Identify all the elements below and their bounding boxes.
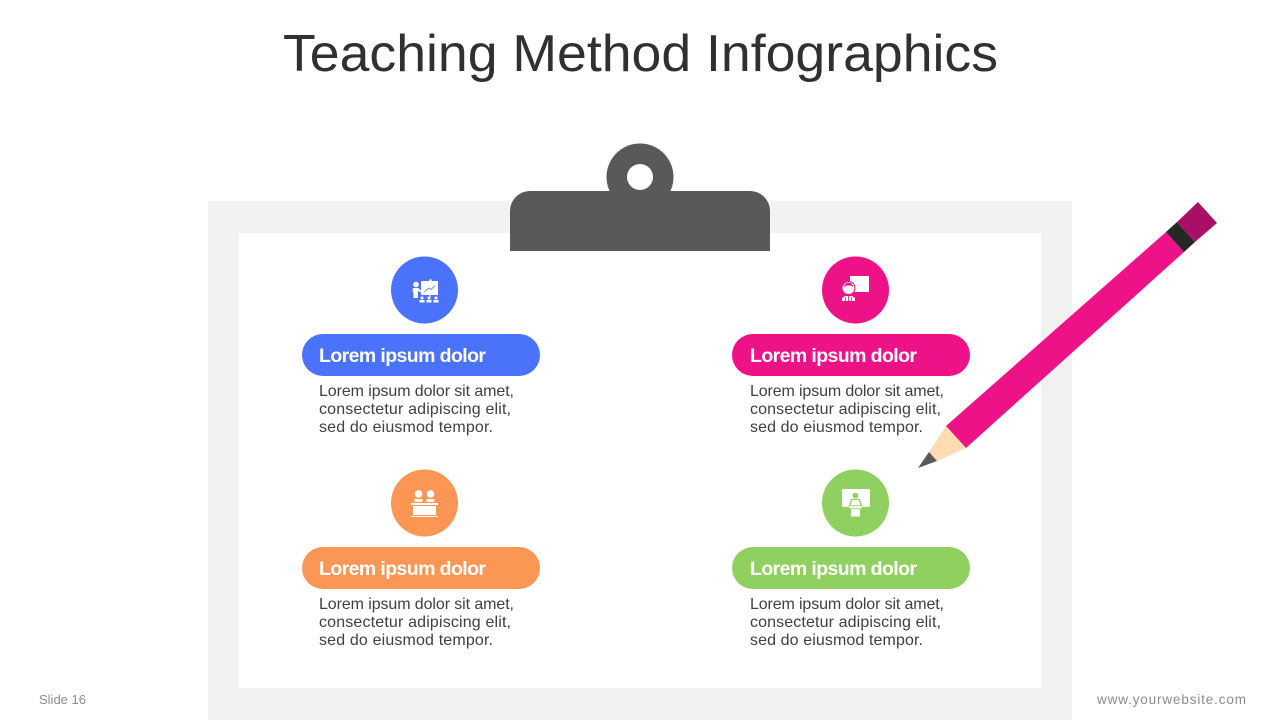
footer: website: www.yourwebsite.com bbox=[1096, 692, 1246, 707]
clipboard paper bbox=[239, 233, 1041, 688]
pencil bbox=[918, 202, 1217, 468]
item: bottom right (green) bbox=[732, 470, 970, 649]
clipboard bbox=[208, 144, 1072, 720]
clipboard board bbox=[208, 201, 1072, 720]
description text: Lorem ipsum dolor sit amet, bbox=[319, 383, 514, 400]
item: bottom left (orange) bbox=[302, 470, 540, 649]
description text: sed do eiusmod tempor. bbox=[319, 632, 493, 649]
description text: Lorem ipsum dolor sit amet, bbox=[750, 596, 944, 613]
label pill bbox=[732, 547, 970, 589]
description text: Lorem ipsum dolor sit amet, bbox=[750, 383, 944, 400]
description text: Lorem ipsum dolor sit amet, bbox=[319, 596, 514, 613]
description text: consectetur adipiscing elit, bbox=[319, 401, 511, 418]
label pill: Lorem ipsum dolor bbox=[750, 558, 917, 580]
clipboard clip bbox=[510, 144, 770, 251]
description text: sed do eiusmod tempor. bbox=[319, 419, 493, 436]
label pill: Lorem ipsum dolor bbox=[319, 558, 486, 580]
label pill bbox=[302, 334, 540, 376]
icon: presenter with screen bbox=[822, 256, 889, 324]
description text bbox=[319, 596, 514, 649]
description text: consectetur adipiscing elit, bbox=[750, 401, 941, 418]
item: top right (pink) bbox=[732, 256, 970, 436]
description text: consectetur adipiscing elit, bbox=[319, 614, 511, 631]
description text bbox=[750, 596, 944, 649]
description text: sed do eiusmod tempor. bbox=[750, 632, 923, 649]
title: Teaching Method Infographics bbox=[283, 25, 998, 83]
label pill bbox=[302, 547, 540, 589]
label pill bbox=[732, 334, 970, 376]
description text: sed do eiusmod tempor. bbox=[750, 419, 923, 436]
icon: speaker at podium before screen bbox=[822, 470, 889, 536]
item: top left (blue) bbox=[302, 256, 540, 436]
label pill: Lorem ipsum dolor bbox=[319, 345, 486, 367]
icon: teacher at presentation board bbox=[391, 256, 458, 324]
icon: two people at desk bbox=[391, 470, 458, 536]
footer: slide number: Slide 16 bbox=[39, 692, 86, 707]
label pill: Lorem ipsum dolor bbox=[750, 345, 917, 367]
description text: consectetur adipiscing elit, bbox=[750, 614, 941, 631]
description text bbox=[750, 383, 944, 436]
description text bbox=[319, 383, 514, 436]
